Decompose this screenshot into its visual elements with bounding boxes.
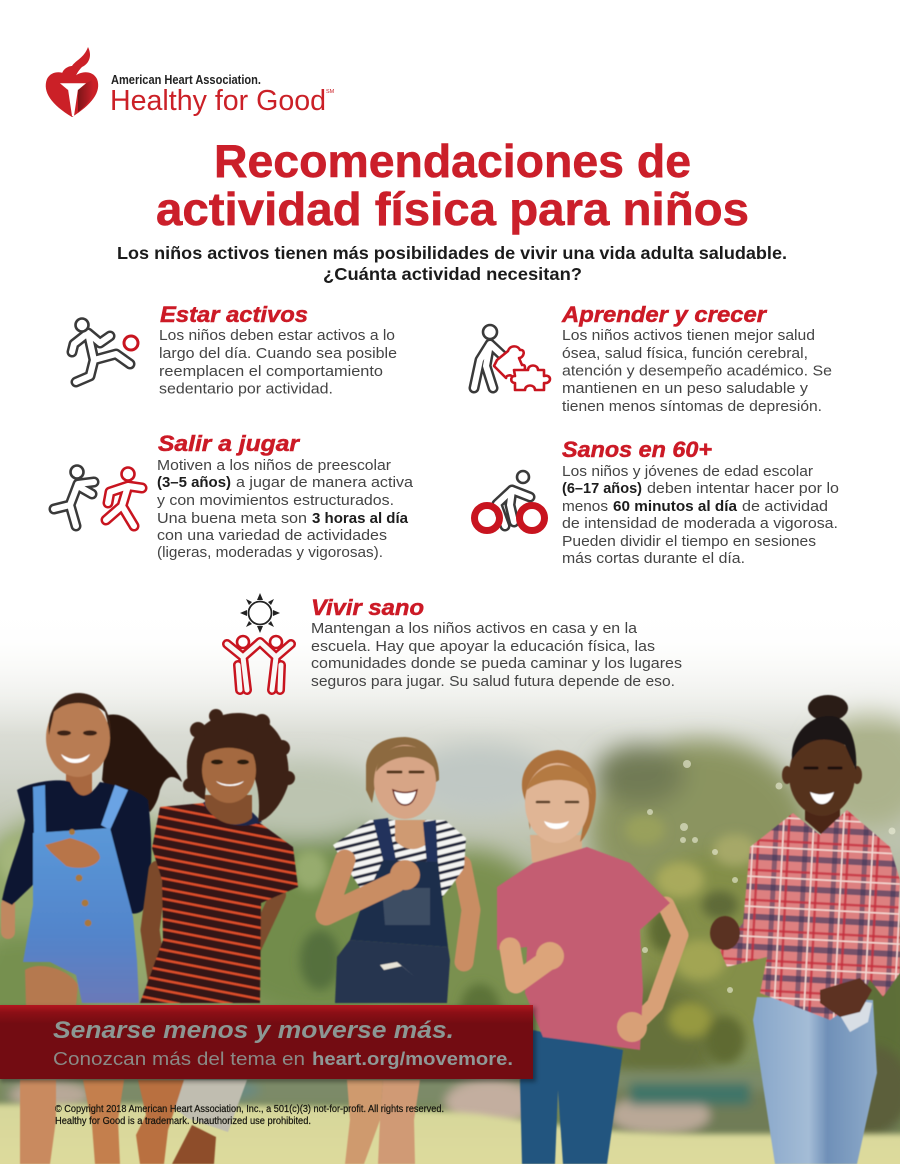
logo heart with torch <box>46 47 98 117</box>
section: Sanos en 60+ <box>562 437 839 567</box>
icon: child riding bicycle <box>474 471 544 530</box>
section: Vivir sano: Mantengan a los niños activos en casa y en la <box>311 621 637 637</box>
section: Sanos en 60+: (6–17 años) <box>562 481 642 497</box>
section: Estar activos: reemplacen el comportamiento <box>159 364 383 380</box>
kid 3: laughing girl in dark overalls <box>326 737 471 1164</box>
section: Sanos en 60+: deben intentar hacer por lo <box>647 481 839 497</box>
copyright note: Healthy for Good is a trademark. Unauthorized use prohibited. <box>55 1116 311 1127</box>
photo background: park with trees and grass <box>0 620 900 1164</box>
section: Salir a jugar: con una variedad de actividades <box>157 528 387 544</box>
section: Estar activos: Los niños deben estar activos a lo <box>159 328 395 344</box>
copyright note: © Copyright 2018 American Heart Association, Inc., a 501(c)(3) not-for-profit. All rights reserved. <box>55 1104 444 1115</box>
section: Salir a jugar: y con movimientos estructurados. <box>157 493 394 509</box>
section: Salir a jugar: 3 horas al día <box>312 511 409 527</box>
section: Aprender y crecer: mantienen en un peso saludable y <box>562 381 809 397</box>
section: Aprender y crecer: Aprender y crecer <box>561 302 768 327</box>
section: Sanos en 60+: menos <box>562 499 608 515</box>
section: Sanos en 60+: de intensidad de moderada a vigorosa. <box>562 516 838 532</box>
banner: call to action: heart.org/movemore. <box>312 1048 513 1069</box>
section: Salir a jugar: Motiven a los niños de preescolar <box>157 458 391 474</box>
subtitle: Los niños activos tienen más posibilidades de vivir una vida adulta saludable. <box>117 243 787 263</box>
icon: sun above two children with raised arms <box>227 593 291 690</box>
subtitle: ¿Cuánta actividad necesitan? <box>323 264 582 284</box>
title: actividad física para niños <box>156 183 749 235</box>
section: Sanos en 60+: 60 minutos al día <box>613 499 738 515</box>
section: Salir a jugar: Una buena meta son <box>157 511 307 527</box>
section: Salir a jugar: (3–5 años) <box>157 475 231 491</box>
section: Sanos en 60+: Sanos en 60+ <box>562 437 712 462</box>
section: Salir a jugar: (ligeras, moderadas y vigorosas). <box>157 545 383 561</box>
section: Aprender y crecer: ósea, salud física, función cerebral, <box>562 346 808 362</box>
kid 2: boy in red striped shirt <box>136 709 298 1164</box>
banner: call to action: Senarse menos y moverse más. <box>53 1017 454 1044</box>
section: Vivir sano: comunidades donde se pueda caminar y los lugares <box>311 656 682 672</box>
subtitle <box>117 243 787 284</box>
kid 1: girl in blue overalls <box>2 693 182 1164</box>
section: Aprender y crecer: Los niños activos tienen mejor salud <box>562 328 815 344</box>
icon: child kicking a ball <box>72 318 138 382</box>
title: Recomendaciones de <box>214 135 691 187</box>
kid 5: girl in plaid shirt and jeans <box>710 695 900 1164</box>
section: Salir a jugar <box>157 431 413 561</box>
logo: American Heart Association Healthy for Good: American Heart Association. <box>111 73 261 87</box>
kid 4: boy in pink t-shirt <box>497 750 680 1164</box>
section: Vivir sano: seguros para jugar. Su salud futura depende de eso. <box>311 674 675 690</box>
section: Estar activos: sedentario por actividad. <box>159 382 333 398</box>
logo: American Heart Association Healthy for Good: SM <box>326 89 335 95</box>
logo: American Heart Association Healthy for Good: Healthy for Good <box>110 85 326 117</box>
title <box>156 135 749 235</box>
section: Estar activos: Estar activos <box>160 302 308 327</box>
section: Salir a jugar: a jugar de manera activa <box>236 475 413 491</box>
section: Salir a jugar: Salir a jugar <box>158 431 301 456</box>
copyright note <box>55 1104 444 1127</box>
icon: person assembling puzzle <box>474 325 550 390</box>
section: Sanos en 60+: más cortas durante el día. <box>562 551 745 567</box>
section: Sanos en 60+: Los niños y jóvenes de edad escolar <box>562 464 813 480</box>
section: Vivir sano <box>311 595 682 690</box>
section: Vivir sano: escuela. Hay que apoyar la educación física, las <box>311 639 655 655</box>
section: Aprender y crecer <box>561 302 832 415</box>
section: Sanos en 60+: Pueden dividir el tiempo en sesiones <box>562 534 816 550</box>
logo: American Heart Association Healthy for Good <box>46 47 335 117</box>
banner: call to action <box>0 1005 536 1082</box>
section: Sanos en 60+: de actividad <box>742 499 828 515</box>
section: Estar activos: largo del día. Cuando sea posible <box>159 346 397 362</box>
section: Vivir sano: Vivir sano <box>311 595 424 620</box>
section: Estar activos <box>159 302 397 398</box>
banner: call to action: Conozcan más del tema en <box>53 1048 305 1069</box>
section: Aprender y crecer: tienen menos síntomas de depresión. <box>562 399 822 415</box>
white fade at top of photo <box>0 600 900 735</box>
section: Aprender y crecer: atención y desempeño académico. Se <box>562 364 832 380</box>
icon: two children running <box>54 466 142 526</box>
